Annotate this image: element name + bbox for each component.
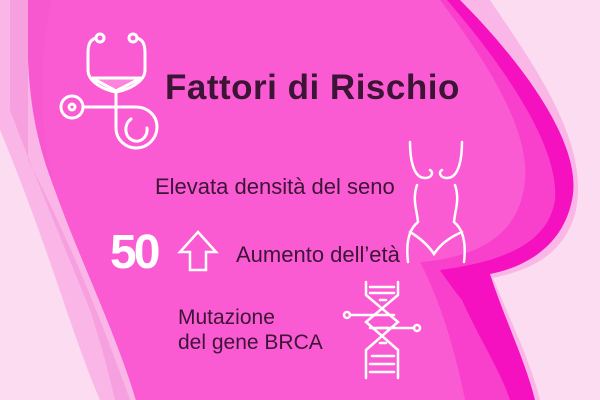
title: Fattori di Rischio: [165, 68, 460, 107]
text: BRCA: Mutazione: [178, 306, 275, 329]
text: BRCA: [178, 306, 323, 354]
text: age: Aumento dell’età: [236, 242, 400, 267]
text: density: Elevata densità del seno: [155, 174, 395, 199]
number 50: 50: [110, 226, 157, 279]
text: BRCA: del gene BRCA: [178, 331, 323, 354]
